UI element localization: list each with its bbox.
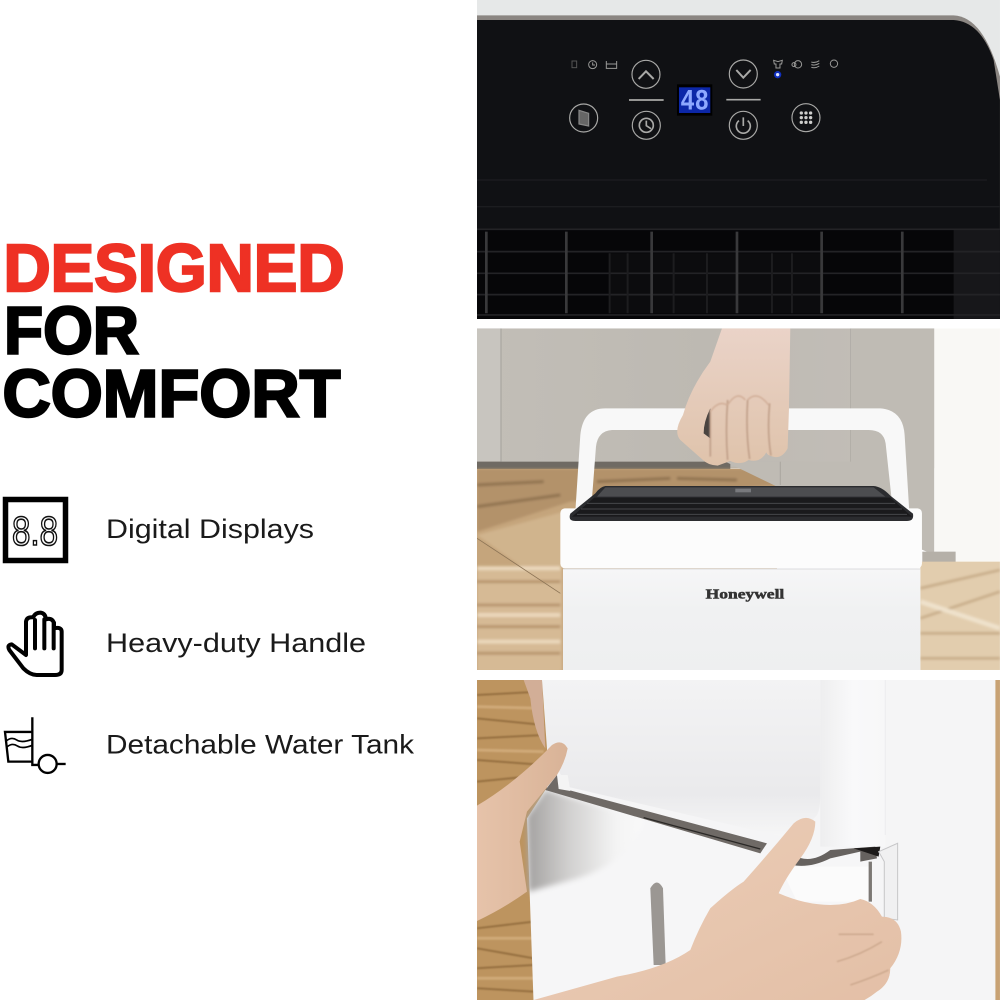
wall receding to right [725,328,934,555]
right hand [534,818,901,1000]
panel: water tank photo [477,680,1000,1000]
icon: hand [8,613,62,675]
status icons [572,60,838,69]
panel: handle photo [477,328,1000,672]
floor right [920,562,1000,670]
white column [934,328,1000,562]
Honeywell logo: Honeywell [706,587,784,602]
vent grille [477,180,1000,319]
LED display: 48 [680,86,709,119]
label: Digital Displays: Digital Displays [106,514,314,544]
wall [477,328,934,485]
handle [575,408,909,512]
grid dots on menu button [800,111,812,124]
touch buttons [570,60,820,139]
hand [677,328,790,466]
tank window slot [650,882,666,965]
lower tank [527,790,547,1000]
title line: DESIGNED: DESIGNED [4,231,344,306]
left hand [477,742,568,921]
floor left [477,469,777,672]
icon: digital display [6,500,66,560]
tank gap [545,775,898,920]
label: Detachable Water Tank: Detachable Water Tank [106,730,415,760]
title line: FOR: FOR [4,294,139,368]
black top vent [570,486,913,521]
icon: digital display: 8.8 [12,508,58,554]
unit body [560,508,922,672]
label: Heavy-duty Handle: Heavy-duty Handle [106,628,366,658]
icon: water tank [5,717,66,773]
indicator light [774,71,781,78]
title [2,231,344,432]
wood floor [477,680,1000,1000]
right side of unit [885,680,996,1000]
panel: control panel photo [477,0,1000,319]
title line: COMFORT: COMFORT [2,356,341,432]
upper front body [542,680,820,804]
